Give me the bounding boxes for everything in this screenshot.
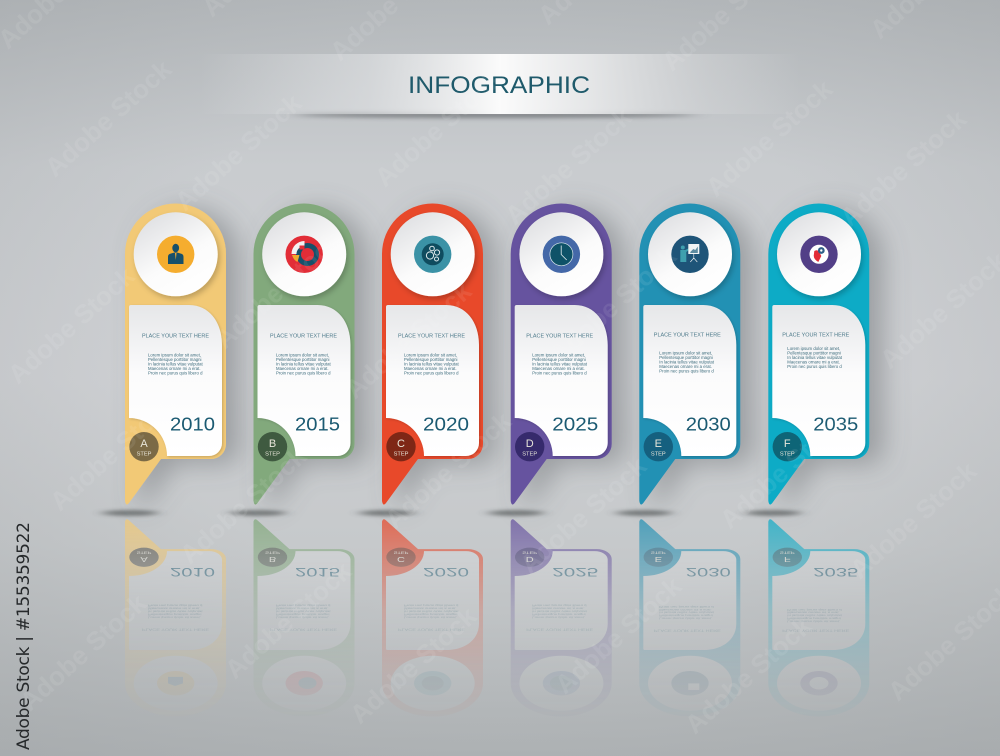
marker C 2020 xyxy=(382,203,483,505)
reflection B: B xyxy=(269,555,276,563)
reflection B xyxy=(254,519,354,692)
panel heading: PLACE YOUR TEXT HERE xyxy=(654,332,721,338)
step badge: C xyxy=(397,438,405,450)
reflection C xyxy=(382,519,483,717)
icon: donut chart xyxy=(286,236,323,273)
stock watermark: Adobe Stock xyxy=(379,405,518,534)
step badge: STEP xyxy=(522,452,537,458)
reflection B: Maecenas ornare mi a erat. xyxy=(276,607,328,610)
year: 2035 xyxy=(813,414,858,434)
reflection E: Maecenas ornare mi a erat. xyxy=(659,608,712,611)
reflection E: Pellentesque porttitor magni xyxy=(659,614,713,617)
panel body text: In lacinia tellus vitae vulputat xyxy=(148,362,204,366)
reflection E: Proin nec purus quis libero d xyxy=(659,605,714,608)
step badge: STEP xyxy=(265,452,280,458)
reflection F: 2035 xyxy=(813,565,859,578)
panel body text: Pellentesque porttitor magni xyxy=(276,357,330,362)
stock watermark: Adobe Stock xyxy=(344,600,483,729)
reflection A: 2010 xyxy=(170,565,215,578)
reflection F: PLACE YOUR TEXT HERE xyxy=(782,628,849,632)
stock watermark: Adobe Stock xyxy=(499,101,638,230)
panel body text: Maecenas ornare mi a erat. xyxy=(276,366,329,371)
stock watermark: Adobe Stock xyxy=(169,87,308,216)
reflection E: 2030 xyxy=(686,565,731,578)
panel body text: Maecenas ornare mi a erat. xyxy=(148,366,201,371)
reflection A: Lorem ipsum dolor sit amet, xyxy=(148,616,201,619)
icon: heart and gear xyxy=(800,236,838,273)
title banner xyxy=(200,54,800,118)
reflection E: Lorem ipsum dolor sit amet, xyxy=(659,617,712,620)
reflection D: In lacinia tellus vitae vulputat xyxy=(532,610,587,613)
panel body text xyxy=(659,350,715,374)
year: 2015 xyxy=(295,414,340,434)
reflection F: Lorem ipsum dolor sit amet, xyxy=(787,620,840,623)
panel body text: Lorem ipsum dolor sit amet, xyxy=(787,346,840,351)
reflection C: Proin nec purus quis libero d xyxy=(404,604,458,607)
icon: presenter and board xyxy=(671,236,709,273)
disc xyxy=(262,212,346,296)
marker F 2035 xyxy=(768,203,869,505)
reflection A: Pellentesque porttitor magni xyxy=(148,613,202,616)
stock watermark: Adobe Stock xyxy=(369,63,508,192)
step badge xyxy=(644,432,673,461)
panel body text: Lorem ipsum dolor sit amet, xyxy=(404,352,457,358)
reflection F: Maecenas ornare mi a erat. xyxy=(787,611,840,614)
step badge xyxy=(386,432,416,461)
banner strip xyxy=(200,54,800,114)
step badge: STEP xyxy=(780,452,795,458)
reflection E: In lacinia tellus vitae vulputat xyxy=(659,611,714,614)
stock watermark: Adobe Stock xyxy=(844,455,983,584)
reflection C: In lacinia tellus vitae vulputat xyxy=(404,610,459,613)
reflection C: STEP xyxy=(394,550,408,555)
reflection F: F xyxy=(784,555,791,563)
panel body text: Proin nec purus quis libero d xyxy=(276,370,331,376)
panel body text xyxy=(276,352,332,376)
reflection F: Pellentesque porttitor magni xyxy=(787,617,841,620)
text panel xyxy=(258,305,350,456)
icon: clock xyxy=(543,236,580,273)
panel body text xyxy=(532,352,588,376)
stock watermark: Adobe Stock xyxy=(14,587,153,716)
marker body xyxy=(768,203,869,505)
text panel xyxy=(643,305,736,456)
mirrored reflections xyxy=(125,519,869,717)
marker D 2025 xyxy=(511,203,612,505)
reflection C: Maecenas ornare mi a erat. xyxy=(404,607,456,610)
disc xyxy=(777,212,861,296)
panel body text: Proin nec purus quis libero d xyxy=(787,364,842,369)
marker body xyxy=(125,203,226,505)
stock watermark: Adobe Stock xyxy=(834,103,973,232)
step badge: D xyxy=(526,438,534,450)
reflection D: Lorem ipsum dolor sit amet, xyxy=(532,616,585,619)
stock watermark: Adobe Stock xyxy=(2,260,141,389)
panel body text: Proin nec purus quis libero d xyxy=(532,370,587,376)
step badge: E xyxy=(655,438,662,450)
panel body text: Pellentesque porttitor magni xyxy=(404,357,458,362)
stock watermark: Adobe Stock xyxy=(219,555,358,684)
year: 2010 xyxy=(170,414,215,434)
stock watermark: Adobe Stock xyxy=(339,275,478,404)
panel heading: PLACE YOUR TEXT HERE xyxy=(398,334,465,340)
reflection D: PLACE YOUR TEXT HERE xyxy=(526,627,593,632)
text panel xyxy=(386,305,479,456)
step badge: STEP xyxy=(137,452,152,458)
panel body text: Lorem ipsum dolor sit amet, xyxy=(276,352,329,358)
icon: gears xyxy=(414,236,451,273)
stock watermark: Adobe Stock xyxy=(549,570,688,699)
reflection B: Lorem ipsum dolor sit amet, xyxy=(276,616,329,619)
reflection B: PLACE YOUR TEXT HERE xyxy=(270,627,337,632)
reflection F: In lacinia tellus vitae vulputat xyxy=(787,614,842,617)
panel body text: In lacinia tellus vitae vulputat xyxy=(276,362,332,366)
banner shadow xyxy=(295,112,695,118)
reflection A: PLACE YOUR TEXT HERE xyxy=(142,627,209,632)
stock watermark: Adobe Stock xyxy=(209,225,348,354)
reflection A xyxy=(125,519,226,692)
stock watermark: Adobe Stock xyxy=(174,440,313,569)
reflection F: Proin nec purus quis libero d xyxy=(787,608,842,611)
panel body text: Pellentesque porttitor magni xyxy=(532,357,586,362)
reflection A: In lacinia tellus vitae vulputat xyxy=(148,610,203,613)
reflection A: Proin nec purus quis libero d xyxy=(148,604,202,607)
panel body text: In lacinia tellus vitae vulputat xyxy=(787,355,843,360)
step badge xyxy=(258,432,287,461)
panel body text: Lorem ipsum dolor sit amet, xyxy=(148,352,201,358)
reflection F xyxy=(768,519,869,717)
step badge xyxy=(773,432,802,461)
stock watermark: Adobe Stock xyxy=(679,610,818,739)
step badge xyxy=(515,432,544,461)
reflection C: 2020 xyxy=(423,565,469,578)
reflection B: In lacinia tellus vitae vulputat xyxy=(276,610,331,613)
reflection A: A xyxy=(140,555,149,563)
reflection E: STEP xyxy=(651,550,666,555)
panel heading: PLACE YOUR TEXT HERE xyxy=(526,334,593,340)
disc xyxy=(391,212,475,296)
step badge: STEP xyxy=(394,452,409,458)
reflection E: PLACE YOUR TEXT HERE xyxy=(654,628,721,632)
step badge xyxy=(129,432,159,461)
panel body text: Lorem ipsum dolor sit amet, xyxy=(659,350,712,356)
reflection A: Maecenas ornare mi a erat. xyxy=(148,607,200,610)
year: 2025 xyxy=(552,414,598,434)
reflection D xyxy=(510,519,612,691)
panel body text xyxy=(787,346,843,369)
panel body text: Pellentesque porttitor magni xyxy=(787,350,841,356)
marker A 2010 xyxy=(125,203,226,505)
panel heading: PLACE YOUR TEXT HERE xyxy=(782,332,849,338)
text panel xyxy=(772,305,865,456)
reflection E: E xyxy=(655,555,662,563)
marker E 2030 xyxy=(639,203,740,505)
reflection B: Proin nec purus quis libero d xyxy=(276,604,330,607)
panel body text: In lacinia tellus vitae vulputat xyxy=(659,360,715,364)
panel heading: PLACE YOUR TEXT HERE xyxy=(270,334,337,340)
panel body text: Maecenas ornare mi a erat. xyxy=(787,360,840,364)
stock watermark: Adobe Stock xyxy=(514,450,653,579)
reflection C: PLACE YOUR TEXT HERE xyxy=(398,627,465,632)
panel body text: Maecenas ornare mi a erat. xyxy=(659,364,712,369)
disc xyxy=(519,212,603,296)
year: 2030 xyxy=(686,414,731,434)
panel body text xyxy=(148,352,204,376)
panel body text: Pellentesque porttitor magni xyxy=(659,355,713,360)
panel body text: Proin nec purus quis libero d xyxy=(148,370,203,376)
panel body text: Proin nec purus quis libero d xyxy=(659,368,714,374)
panel body text: Proin nec purus quis libero d xyxy=(404,370,459,376)
stock id label: Adobe Stock | #155359522 xyxy=(14,522,34,750)
step badge: B xyxy=(269,438,276,450)
reflection D: Proin nec purus quis libero d xyxy=(532,604,587,607)
panel body text: In lacinia tellus vitae vulputat xyxy=(404,362,460,366)
panel body text: Pellentesque porttitor magni xyxy=(148,357,202,362)
reflection D: D xyxy=(526,555,534,563)
step badge: F xyxy=(784,438,791,450)
stock watermark: Adobe Stock xyxy=(544,240,683,369)
stock watermark: Adobe Stock xyxy=(700,73,839,202)
stock watermark: Adobe Stock xyxy=(39,53,178,182)
stock watermark: Adobe Stock xyxy=(714,405,853,534)
panel heading: PLACE YOUR TEXT HERE xyxy=(142,334,209,340)
icon: businessman xyxy=(157,236,194,273)
panel body text: Maecenas ornare mi a erat. xyxy=(404,366,457,371)
year: 2020 xyxy=(423,414,469,434)
reflection B: 2015 xyxy=(295,565,340,578)
reflection C: C xyxy=(397,555,405,563)
title: INFOGRAPHIC xyxy=(408,72,590,99)
step badge: A xyxy=(140,438,148,450)
reflection A: STEP xyxy=(137,550,151,555)
disc xyxy=(134,212,218,296)
panel body text xyxy=(404,352,460,376)
reflection E xyxy=(639,519,740,695)
reflection D: Maecenas ornare mi a erat. xyxy=(532,607,585,610)
panel body text: Lorem ipsum dolor sit amet, xyxy=(532,352,585,358)
text panel xyxy=(515,305,608,456)
marker body xyxy=(639,203,740,505)
reflection B: STEP xyxy=(265,550,280,555)
reflection B: Pellentesque porttitor magni xyxy=(276,613,330,616)
marker body xyxy=(382,203,483,505)
step badge: STEP xyxy=(651,452,666,458)
reflection C: Lorem ipsum dolor sit amet, xyxy=(404,616,457,619)
disc xyxy=(648,212,732,296)
marker B 2015 xyxy=(254,203,354,505)
reflection D: STEP xyxy=(522,550,537,555)
panel body text: Maecenas ornare mi a erat. xyxy=(532,366,585,371)
marker body xyxy=(254,203,354,505)
reflection C: Pellentesque porttitor magni xyxy=(404,613,458,616)
ground shadows xyxy=(102,510,801,516)
stock watermark: Adobe Stock xyxy=(44,387,183,516)
reflection D: 2025 xyxy=(552,565,599,578)
reflection D: Pellentesque porttitor magni xyxy=(532,613,586,616)
marker body xyxy=(511,203,612,505)
panel body text: In lacinia tellus vitae vulputat xyxy=(532,362,588,366)
text panel xyxy=(129,305,222,456)
reflection F: STEP xyxy=(780,550,795,555)
